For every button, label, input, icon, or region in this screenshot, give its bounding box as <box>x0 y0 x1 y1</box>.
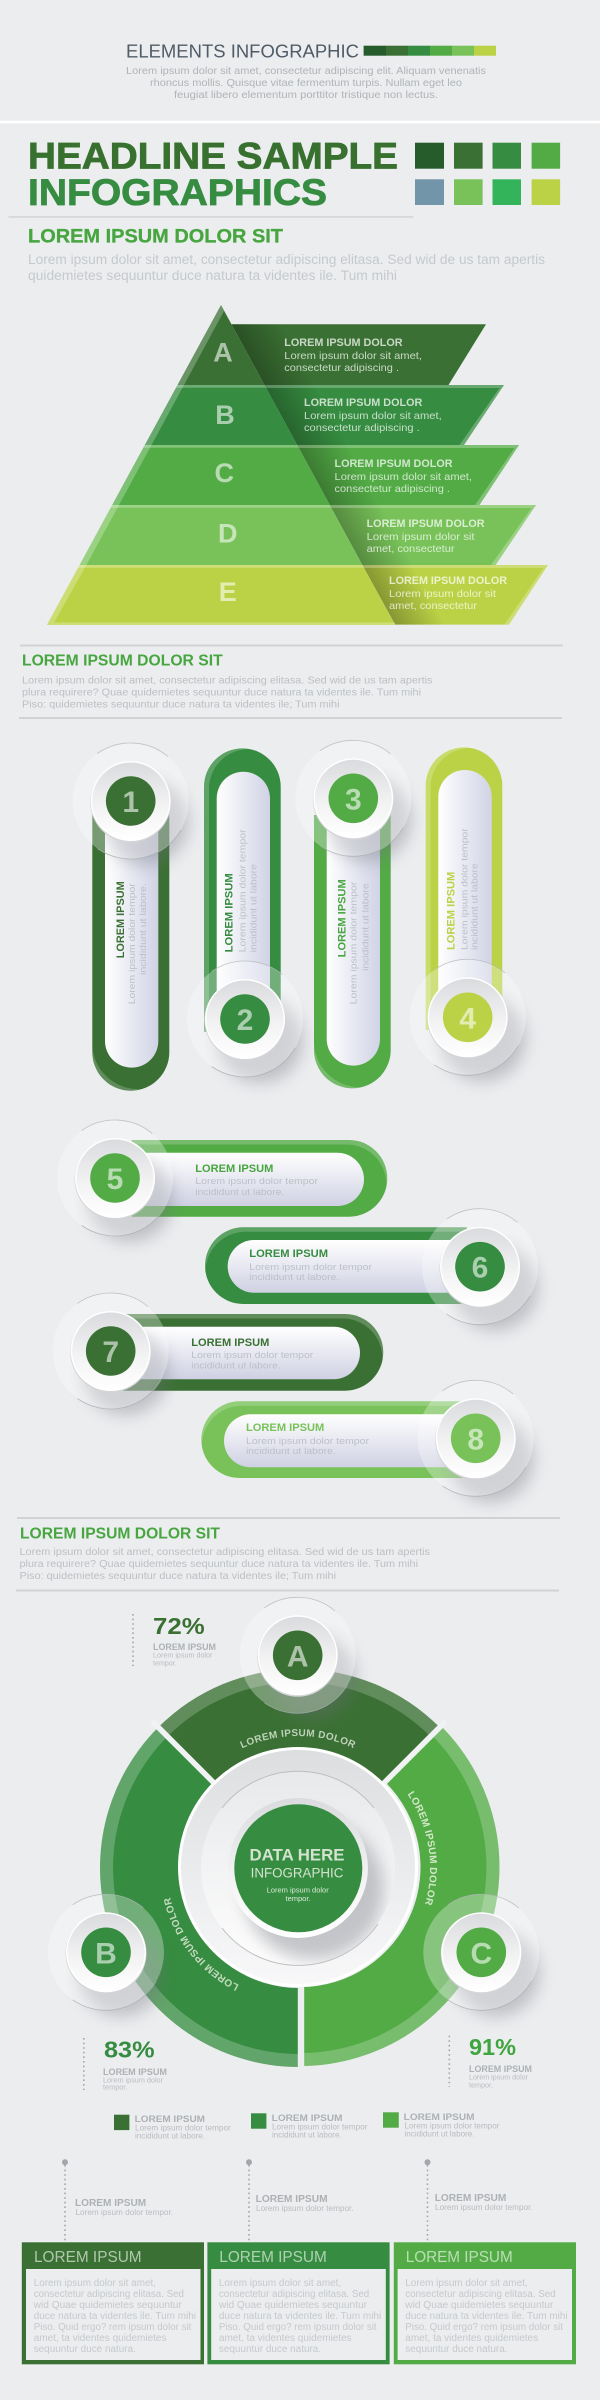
header: elements infographic <box>126 40 496 101</box>
badge 6: 6 <box>472 1252 488 1285</box>
horizontal pill 8 <box>200 1380 534 1502</box>
badge 2 <box>220 994 270 1044</box>
stat 91%: tempor. <box>469 2083 493 2090</box>
connector 2: LOREM IPSUM <box>256 2193 328 2205</box>
pyramid level B: B <box>215 400 235 430</box>
connector 3 <box>424 2159 533 2242</box>
badge B: B <box>95 1937 117 1970</box>
banner B <box>264 385 504 445</box>
vertical pill 4: LOREM IPSUM <box>446 872 458 950</box>
pyramid level E: E <box>219 577 237 607</box>
vertical pill 4: incididunt ut labore <box>470 863 481 950</box>
vertical pill 1: Lorem ipsum dolor tempor <box>127 883 138 1004</box>
connector 1 <box>62 2159 173 2242</box>
horizontal pill 5 <box>57 1120 388 1242</box>
legend item 1: incididunt ut labore. <box>135 2132 205 2141</box>
connector 3: Lorem ipsum dolor tempor. <box>435 2203 533 2212</box>
horizontal pill 6: incididunt ut labore. <box>249 1272 339 1283</box>
legend item 3: LOREM IPSUM <box>404 2112 475 2123</box>
section text 1: quidemietes sequuntur duce natura ta videntes ile. Tum mihi <box>28 268 397 283</box>
text box 2: sequuntur duce natura. <box>219 2344 321 2355</box>
vertical pill 2: Lorem ipsum dolor tempor <box>238 829 249 952</box>
banner B: consectetur adipiscing . <box>304 422 420 434</box>
text box 3: Piso. Quid ergo? rem ipsum dolor sit <box>405 2322 563 2333</box>
badge 2: 2 <box>237 1004 253 1037</box>
badge 4 <box>443 992 493 1042</box>
banner B: LOREM IPSUM DOLOR <box>304 397 422 409</box>
legend item 2: incididunt ut labore. <box>272 2131 342 2140</box>
text box 3 <box>394 2242 576 2364</box>
vertical pill 1: LOREM IPSUM <box>115 881 127 958</box>
horizontal pill 7: Lorem ipsum dolor tempor <box>191 1350 313 1361</box>
stat 83%: tempor. <box>103 2084 127 2091</box>
banner E: amet, consectetur <box>389 600 478 612</box>
section text 2: Lorem ipsum dolor sit amet, consectetur adipiscing elitasa. Sed wid de us tam apertis <box>22 674 432 686</box>
headline: INFOGRAPHICS <box>28 171 327 213</box>
badge 3: 3 <box>345 783 362 816</box>
vertical pill 2: LOREM IPSUM <box>224 873 236 952</box>
text box 1: Piso. Quid ergo? rem ipsum dolor sit <box>34 2322 192 2333</box>
badge 7 <box>86 1326 136 1376</box>
horizontal pill 6: LOREM IPSUM <box>249 1248 328 1260</box>
text box 3: consectetur adipiscing elitasa. Sed <box>405 2289 556 2300</box>
banner A: consectetur adipiscing . <box>284 362 399 374</box>
vertical pill 3: incididunt ut labore <box>360 883 371 971</box>
pyramid level C: C <box>215 458 234 488</box>
stat 83%: 83% <box>104 2037 155 2063</box>
vertical pill 2 <box>187 747 303 1083</box>
stat 72%: LOREM IPSUM <box>153 1642 216 1653</box>
legend item 2 <box>251 2113 368 2140</box>
section text 2: Piso: quidemietes sequuntur duce natura ta videntes ile; Tum mihi <box>22 698 340 710</box>
horizontal pill 5: Lorem ipsum dolor tempor <box>195 1176 318 1187</box>
pyramid level A <box>178 305 264 385</box>
stat 72% <box>133 1613 216 1668</box>
segment label B: LOREM IPSUM DOLOR <box>164 1898 238 1991</box>
stat 83%: LOREM IPSUM <box>103 2067 167 2078</box>
text box 1: amet, ta videntes quidemietes <box>34 2333 167 2344</box>
text box 3: LOREM IPSUM <box>406 2249 513 2266</box>
section text 2 <box>22 674 432 710</box>
badge 5 <box>90 1153 140 1203</box>
horizontal pill 7 <box>53 1293 384 1415</box>
legend item 1: LOREM IPSUM <box>135 2114 205 2125</box>
text box 3: Lorem ipsum dolor sit amet, <box>405 2278 528 2289</box>
text box 3: amet, ta videntes quidemietes <box>405 2333 538 2344</box>
text box 1: LOREM IPSUM <box>34 2249 142 2266</box>
badge 1: 1 <box>122 786 139 819</box>
centre text: Lorem ipsum dolor <box>267 1886 329 1895</box>
horizontal pill 8: Lorem ipsum dolor tempor <box>246 1436 369 1447</box>
text box 1: duce natura ta videntes ile. Tum mihi <box>34 2311 196 2322</box>
badge 3 <box>328 774 378 823</box>
vertical pill 4 <box>410 746 526 1081</box>
badge 5: 5 <box>107 1163 123 1196</box>
text box 3: wid Quae quidemietes sequuntur <box>404 2300 554 2311</box>
text box 1: consectetur adipiscing elitasa. Sed <box>34 2289 184 2300</box>
badge 8: 8 <box>467 1423 484 1456</box>
banner B: Lorem ipsum dolor sit amet, <box>304 410 442 422</box>
pyramid level D: D <box>218 519 237 549</box>
pyramid level C <box>112 445 330 505</box>
banner C <box>297 445 519 505</box>
text box 2: Lorem ipsum dolor sit amet, <box>219 2278 341 2289</box>
connector 1: Lorem ipsum dolor tempor. <box>76 2208 173 2217</box>
banner C: LOREM IPSUM DOLOR <box>334 458 452 470</box>
colour swatches <box>415 143 560 205</box>
connector 2 <box>246 2159 354 2242</box>
legend item 3 <box>383 2112 500 2139</box>
connector 1: LOREM IPSUM <box>75 2197 146 2209</box>
banner D: Lorem ipsum dolor sit <box>367 531 475 543</box>
stat 91%: LOREM IPSUM <box>469 2064 532 2075</box>
centre text: tempor. <box>285 1894 311 1903</box>
legend item 1 <box>114 2114 231 2141</box>
text box 3: duce natura ta videntes ile. Tum mihi <box>405 2311 568 2322</box>
header title: ELEMENTS INFOGRAPHIC <box>126 40 359 61</box>
banner D <box>330 505 536 565</box>
banner E <box>362 565 548 625</box>
legend item 3: incididunt ut labore. <box>404 2130 474 2139</box>
horizontal pill 8: incididunt ut labore. <box>246 1446 336 1457</box>
vertical pill 1 <box>73 743 189 1091</box>
vertical pill 4: Lorem ipsum dolor tempor <box>459 828 470 950</box>
stat 72%: 72% <box>153 1613 205 1639</box>
section text 3 <box>20 1546 430 1582</box>
banner A: LOREM IPSUM DOLOR <box>284 337 403 349</box>
centre text <box>250 1847 344 1903</box>
text box 3: sequuntur duce natura. <box>405 2344 508 2355</box>
pyramid level B <box>145 385 297 445</box>
segment A <box>158 1669 440 1783</box>
stat 91% <box>449 2034 532 2090</box>
horizontal pill 7: incididunt ut labore. <box>191 1361 281 1372</box>
centre text: DATA HERE <box>250 1847 344 1865</box>
text box 1: sequuntur duce natura. <box>34 2344 136 2355</box>
banner C: consectetur adipiscing . <box>334 483 450 495</box>
header description: rhoncus mollis. Quisque vitae fermentum turpis. Nullam eget leo <box>150 77 462 89</box>
badge B <box>81 1928 131 1977</box>
badge 4: 4 <box>459 1002 476 1035</box>
banner C: Lorem ipsum dolor sit amet, <box>334 471 472 483</box>
segment B <box>100 1727 299 2067</box>
section heading 2: LOREM IPSUM DOLOR SIT <box>22 652 223 669</box>
badge 8 <box>451 1414 501 1463</box>
legend item 3: Lorem ipsum dolor tempor <box>404 2122 500 2131</box>
vertical pill 2: incididunt ut labore <box>249 864 260 952</box>
legend item 2: LOREM IPSUM <box>272 2113 343 2124</box>
badge 6 <box>455 1242 505 1291</box>
pyramid level D <box>80 505 362 565</box>
pyramid level E <box>47 565 395 625</box>
connector 3: LOREM IPSUM <box>435 2192 507 2204</box>
text box 2: LOREM IPSUM <box>219 2249 327 2266</box>
horizontal pill 7: LOREM IPSUM <box>191 1337 269 1349</box>
section heading 1: LOREM IPSUM DOLOR SIT <box>28 225 283 247</box>
badge A: A <box>287 1640 309 1673</box>
stat 91%: 91% <box>469 2034 516 2060</box>
text box 2: amet, ta videntes quidemietes <box>219 2333 352 2344</box>
text box 2 <box>207 2242 390 2364</box>
pyramid level A: A <box>213 338 233 368</box>
banner E: Lorem ipsum dolor sit <box>389 588 496 600</box>
horizontal pill 5: LOREM IPSUM <box>195 1163 273 1175</box>
text box 2: Piso. Quid ergo? rem ipsum dolor sit <box>219 2322 377 2333</box>
section text 3: Lorem ipsum dolor sit amet, consectetur adipiscing elitasa. Sed wid de us tam apertis <box>20 1546 430 1558</box>
section heading 3: LOREM IPSUM DOLOR SIT <box>20 1526 220 1543</box>
banner D: amet, consectetur <box>367 543 455 555</box>
stat 83% <box>84 2037 167 2091</box>
text box 2: duce natura ta videntes ile. Tum mihi <box>219 2311 381 2322</box>
header colour bar <box>364 46 496 56</box>
badge C: C <box>470 1937 492 1970</box>
horizontal pill 8: LOREM IPSUM <box>246 1422 324 1434</box>
section text 1 <box>28 252 545 283</box>
stat 83%: Lorem ipsum dolor <box>103 2078 164 2085</box>
vertical pill 3: LOREM IPSUM <box>337 879 349 957</box>
stat 72%: tempor. <box>153 1661 177 1668</box>
badge C <box>456 1928 506 1977</box>
headline: HEADLINE SAMPLE <box>28 134 398 176</box>
headline <box>28 134 398 213</box>
text box 2: wid Quae quidemietes sequuntur <box>218 2300 368 2311</box>
connector 2: Lorem ipsum dolor tempor. <box>256 2204 354 2213</box>
text box 1 <box>22 2242 204 2364</box>
segment label C: LOREM IPSUM DOLOR <box>408 1791 437 1905</box>
text box 2: consectetur adipiscing elitasa. Sed <box>219 2289 369 2300</box>
text box 1: wid Quae quidemietes sequuntur <box>33 2300 182 2311</box>
centre text: INFOGRAPHIC <box>251 1865 344 1880</box>
section text 3: Piso: quidemietes sequuntur duce natura ta videntes ile; Tum mihi <box>20 1570 336 1582</box>
section text 1: Lorem ipsum dolor sit amet, consectetur adipiscing elitasa. Sed wid de us tam apertis <box>28 252 545 267</box>
header description <box>126 65 486 101</box>
centre disk <box>178 1747 418 1987</box>
segment label A: LOREM IPSUM DOLOR <box>240 1729 356 1748</box>
banner D: LOREM IPSUM DOLOR <box>367 518 485 530</box>
header description: Lorem ipsum dolor sit amet, consectetur adipiscing elit. Aliquam venenatis <box>126 65 486 77</box>
banner A <box>232 324 486 385</box>
section text 2: plura requirere? Quae quidemietes sequuntur duce natura ta videntes ile. Tum mihi <box>22 686 421 698</box>
horizontal pill 6: Lorem ipsum dolor tempor <box>249 1262 372 1273</box>
stat 72%: Lorem ipsum dolor <box>153 1653 213 1660</box>
badge 1 <box>106 776 156 826</box>
donut chart <box>66 1596 546 2067</box>
horizontal pill 5: incididunt ut labore. <box>195 1187 284 1198</box>
vertical pill 3 <box>295 740 411 1088</box>
badge 7: 7 <box>102 1336 119 1369</box>
legend item 1: Lorem ipsum dolor tempor <box>135 2124 231 2133</box>
segment C <box>300 1726 499 2066</box>
vertical pill 3: Lorem ipsum dolor tempor <box>349 882 360 1004</box>
header description: feugiat libero elementum porttitor tristique non lectus. <box>174 89 438 101</box>
horizontal pill 6 <box>204 1209 538 1331</box>
badge A <box>273 1630 323 1680</box>
banner A: Lorem ipsum dolor sit amet, <box>284 350 422 362</box>
section text 3: plura requirere? Quae quidemietes sequuntur duce natura ta videntes ile. Tum mihi <box>20 1558 418 1570</box>
text box 1: Lorem ipsum dolor sit amet, <box>34 2278 156 2289</box>
banner E: LOREM IPSUM DOLOR <box>389 575 507 587</box>
pyramid chart <box>47 305 548 625</box>
legend item 2: Lorem ipsum dolor tempor <box>272 2123 368 2132</box>
stat 91%: Lorem ipsum dolor <box>469 2075 529 2082</box>
vertical pill 1: incididunt ut labore. <box>138 883 149 975</box>
